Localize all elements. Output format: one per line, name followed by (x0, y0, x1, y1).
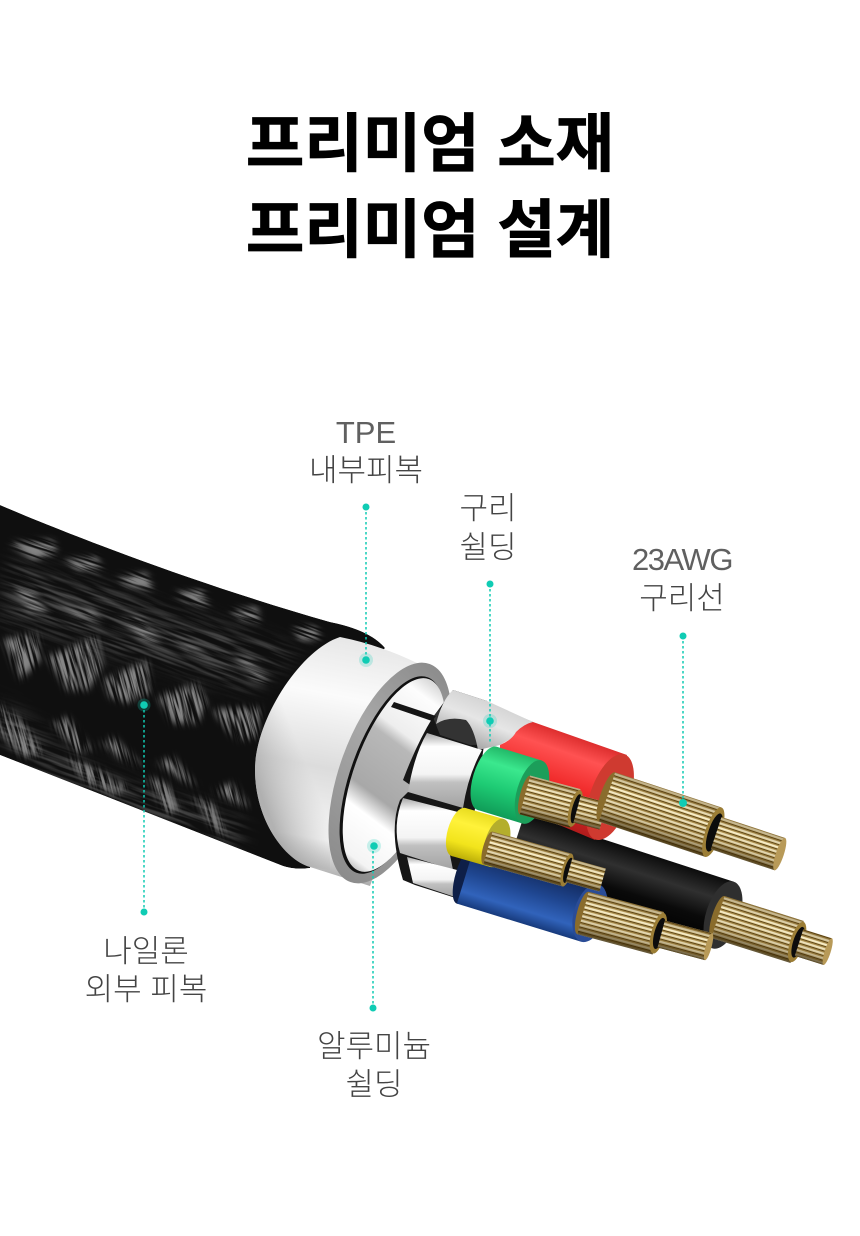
wire: blue copper strands (572, 890, 717, 969)
wire: yellow copper strands (479, 830, 607, 896)
callout: copper shielding: 쉴딩 (459, 530, 517, 565)
wire: green copper strands (515, 774, 608, 835)
cable illustration (0, 505, 833, 965)
wire: blue insulation (447, 843, 614, 946)
callout: TPE inner jacket (309, 415, 423, 667)
callout: copper shielding: 구리 (459, 491, 517, 526)
callout: aluminum shielding (317, 839, 431, 1102)
callout: copper shielding (459, 491, 517, 742)
callout: TPE inner jacket: 내부피복 (309, 453, 423, 488)
callout: TPE inner jacket: TPE (336, 415, 396, 450)
wire: black insulation (503, 814, 750, 954)
callout: nylon outer sheath (85, 698, 207, 1007)
TPE inner jacket (255, 637, 445, 886)
nylon braided outer sheath (0, 505, 385, 869)
callout: nylon outer sheath: 외부 피복 (85, 972, 207, 1007)
title (246, 110, 614, 266)
title: 프리미엄 설계 (246, 196, 614, 266)
wire: black copper strands (706, 894, 837, 973)
aluminum shielding (391, 690, 533, 900)
wire: green insulation (464, 743, 556, 828)
wire: red insulation (500, 722, 644, 846)
wire: yellow insulation (441, 805, 515, 870)
jacket end ring (303, 647, 477, 899)
title: 프리미엄 소재 (246, 110, 614, 180)
wire: red copper strands (592, 770, 792, 880)
callout: 23AWG copper wire (632, 542, 732, 807)
callout: aluminum shielding: 알루미늄 (317, 1029, 431, 1064)
infographic canvas (0, 112, 833, 1097)
callout: 23AWG copper wire: 23AWG (632, 542, 732, 577)
callout: 23AWG copper wire: 구리선 (639, 581, 725, 616)
callout: nylon outer sheath: 나일론 (103, 934, 189, 969)
callout: aluminum shielding: 쉴딩 (345, 1067, 403, 1102)
